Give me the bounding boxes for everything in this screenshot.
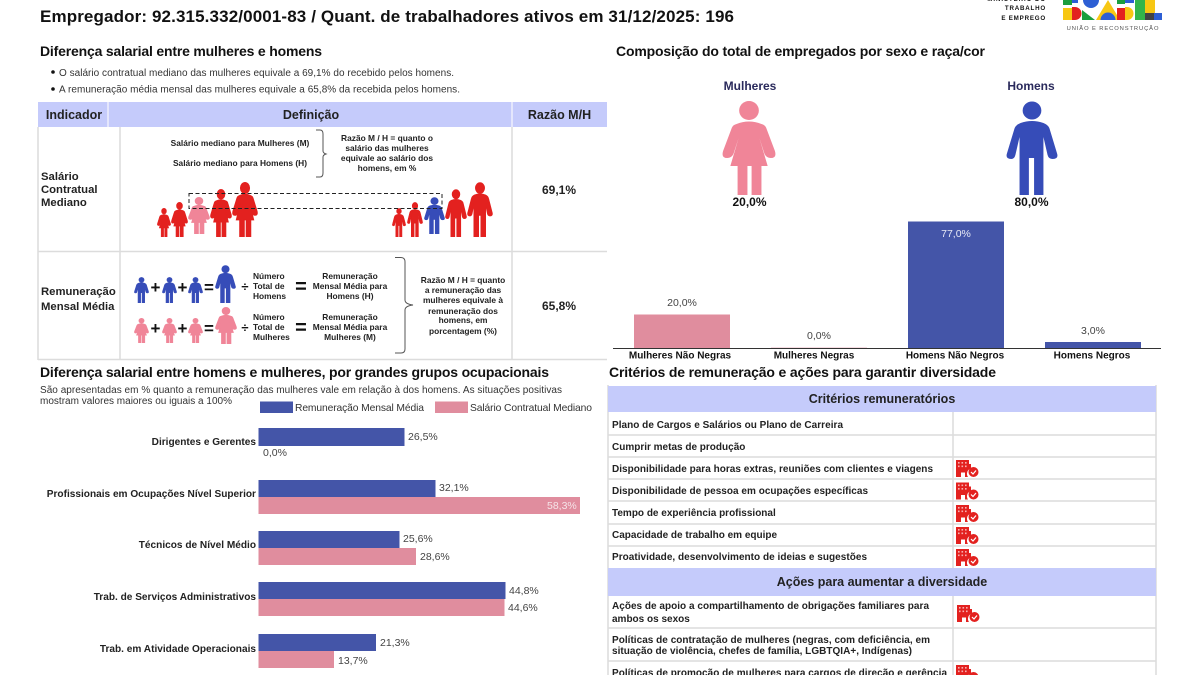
ratio definition (341, 133, 433, 173)
formula: women: + (178, 319, 188, 338)
action rows: ambos os sexos (612, 614, 690, 625)
ratio definition: homens, em (439, 315, 487, 325)
column chart: sex and race: 77,0% (941, 228, 971, 240)
ratio definition: a remuneração das (425, 285, 502, 295)
section heading: salary gap: Diferença salarial entre mulheres e homens (40, 43, 322, 59)
group: Técnicos (139, 531, 450, 565)
indicator name: Mensal Média (41, 301, 115, 313)
indicator name: Contratual (41, 184, 98, 196)
criteria rows: Capacidade de trabalho em equipe (612, 530, 777, 541)
table header (38, 102, 607, 127)
table: criteria and actions (608, 385, 1156, 675)
column chart: sex and race: 0,0% (807, 330, 831, 342)
formula: men: = (204, 278, 214, 297)
criteria rows: Plano de Cargos e Salários ou Plano de Carreira (612, 420, 843, 431)
salary labels: Salário mediano para Homens (H) (173, 158, 307, 168)
employer heading: Empregador: 92.315.332/0001-83 / Quant. de trabalhadores ativos em 31/12/2025: 196 (40, 7, 734, 26)
group: Técnicos: 28,6% (420, 551, 450, 563)
criteria rows (612, 420, 933, 563)
icons: company adopts (956, 460, 978, 566)
formula: women: = (204, 319, 214, 338)
summary bullets (51, 68, 460, 96)
header: Critérios remuneratórios (608, 386, 1156, 412)
icon: woman (723, 101, 775, 195)
formula: women: Total de (253, 322, 285, 332)
table header: Indicador (46, 108, 102, 122)
row: Salário Contratual Mediano (41, 130, 576, 237)
icon: women line-up (157, 183, 257, 237)
logo: Brasil: UNIÃO E RECONSTRUÇÃO (1067, 25, 1159, 32)
group: Dirigentes e Gerentes: 0,0% (263, 447, 287, 459)
formula: women: Mulheres (253, 332, 290, 342)
formula: men: Remuneração (322, 271, 378, 281)
group: Atividade Operacionais: Trab. em Atividade Operacionais (100, 644, 256, 655)
action rows: situação de violência, chefes de família, LGBTQIA+, Indígenas) (612, 646, 912, 657)
formula: women: Remuneração (322, 312, 378, 322)
ratio definition (421, 275, 505, 336)
ministry label (987, 0, 1046, 22)
column chart: sex and race: Homens Negros (1054, 350, 1131, 362)
column chart: sex and race: Mulheres Negras (774, 350, 855, 362)
group: Técnicos: Técnicos de Nível Médio (139, 540, 256, 551)
women share (723, 79, 777, 209)
formula: women (134, 307, 388, 344)
ratio definition: equivale ao salário dos (341, 153, 433, 163)
header: Critérios remuneratórios: Critérios remuneratórios (809, 392, 955, 406)
formula: women: Número (253, 312, 285, 322)
salary labels (171, 138, 310, 168)
formula: women: ÷ (241, 320, 249, 335)
section heading: occupational groups: Diferença salarial entre homens e mulheres, por grandes grupos ocupacionais (40, 364, 549, 380)
criteria rows: Cumprir metas de produção (612, 442, 745, 453)
action rows (612, 601, 947, 675)
formula: men: Número (253, 271, 285, 281)
table: salary indicators (38, 102, 607, 360)
summary bullets: O salário contratual mediano das mulheres equivale a 69,1% do recebido pelos homens. (59, 68, 454, 79)
women share: Mulheres (724, 79, 777, 93)
summary bullets: A remuneração média mensal das mulheres equivale a 65,8% da recebida pelos homens. (59, 84, 460, 96)
indicator name: Salário (41, 171, 79, 183)
section heading: criteria: Critérios de remuneração e ações para garantir diversidade (609, 364, 996, 380)
section heading: workforce composition: Composição do total de empregados por sexo e raça/cor (616, 43, 986, 59)
icon: men line-up (392, 183, 492, 237)
group: Dirigentes e Gerentes: Dirigentes e Gerentes (152, 437, 256, 448)
group: Dirigentes e Gerentes (152, 428, 438, 459)
table header: Razão M/H (528, 108, 591, 122)
men share: 80,0% (1014, 195, 1049, 209)
group: Técnicos: 25,6% (403, 533, 433, 545)
formula: women: Mensal Média para (313, 322, 388, 332)
icon: man (1007, 102, 1057, 195)
group: Serviços Administrativos: 44,8% (509, 585, 539, 597)
ministry label: TRABALHO (1005, 5, 1046, 12)
column chart: sex and race: Mulheres Não Negras (629, 350, 732, 362)
group: Serviços Administrativos (94, 582, 539, 616)
chart note: mostram valores maiores ou iguais a 100% (40, 396, 232, 407)
group: Serviços Administrativos: Trab. de Serviços Administrativos (94, 592, 256, 603)
formula: men: + (151, 278, 161, 297)
ratio definition: salário das mulheres (345, 143, 429, 153)
ministry label: E EMPREGO (1001, 15, 1046, 22)
formula: men: Total de (253, 281, 285, 291)
group: Atividade Operacionais: 21,3% (380, 637, 410, 649)
header: Ações para aumentar a diversidade: Ações para aumentar a diversidade (777, 575, 987, 589)
ratio definition: Razão M / H = quanto o (341, 133, 433, 143)
group: Profissionais: 32,1% (439, 482, 469, 494)
legend: Salário Contratual Mediano (470, 403, 592, 414)
logo: Brasil (1063, 0, 1162, 32)
column chart: sex and race (613, 222, 1161, 362)
group: Profissionais: 58,3% (547, 500, 577, 512)
men share (1007, 79, 1057, 209)
criteria rows: Disponibilidade para horas extras, reuniões com clientes e viagens (612, 464, 933, 475)
formula: men: Homens (253, 291, 286, 301)
salary labels: Salário mediano para Mulheres (M) (171, 138, 310, 148)
ratio definition: porcentagem (%) (429, 326, 497, 336)
ratio definition: Razão M / H = quanto (421, 275, 505, 285)
formula: men: Mensal Média para (313, 281, 388, 291)
criteria rows: Proatividade, desenvolvimento de ideias e sugestões (612, 552, 867, 563)
men share: Homens (1007, 79, 1055, 93)
column chart: sex and race: 20,0% (667, 297, 697, 309)
action rows: Políticas de contratação de mulheres (negras, com deficiência, em (612, 635, 930, 646)
group: Serviços Administrativos: 44,6% (508, 602, 538, 614)
group: Profissionais (47, 480, 580, 514)
legend (260, 402, 592, 414)
formula: women: = (295, 317, 307, 339)
ratio value: 69,1% (542, 183, 576, 197)
chart note (40, 385, 562, 407)
criteria rows: Disponibilidade de pessoa em ocupações específicas (612, 486, 868, 497)
formula: men: ÷ (241, 279, 249, 294)
action rows: Ações de apoio a compartilhamento de obrigações familiares para (612, 601, 929, 612)
indicator name (41, 171, 98, 209)
row: Remuneração Mensal Média (41, 258, 576, 353)
formula: men: + (178, 278, 188, 297)
bar chart: occupational groups (47, 428, 580, 668)
formula: men: Homens (H) (326, 291, 374, 301)
group: Dirigentes e Gerentes: 26,5% (408, 431, 438, 443)
ratio definition: homens, em % (358, 163, 417, 173)
ratio definition: mulheres equivale à (423, 295, 503, 305)
women share: 20,0% (732, 195, 767, 209)
legend: Remuneração Mensal Média (295, 403, 424, 414)
column chart: sex and race: 3,0% (1081, 325, 1105, 337)
formula: men: = (295, 276, 307, 298)
indicator name (41, 286, 116, 313)
group: Atividade Operacionais (100, 634, 410, 668)
formula: women: Mulheres (M) (324, 332, 376, 342)
median dashed box (189, 194, 442, 208)
ratio definition: remuneração dos (428, 306, 498, 316)
table header: Definição (283, 108, 339, 122)
formula: women: + (151, 319, 161, 338)
chart note: São apresentadas em % quanto a remuneração das mulheres vale em relação à dos homens. As situações positivas (40, 385, 562, 396)
icons: actions adopted (956, 605, 980, 675)
group: Atividade Operacionais: 13,7% (338, 655, 368, 667)
criteria rows: Tempo de experiência profissional (612, 508, 776, 519)
indicator name: Remuneração (41, 286, 116, 298)
brace (395, 258, 413, 353)
column chart: sex and race: Homens Não Negros (906, 350, 1005, 362)
formula: men (134, 266, 388, 303)
indicator name: Mediano (41, 197, 87, 209)
header: Ações para aumentar a diversidade (608, 568, 1156, 596)
group: Profissionais: Profissionais em Ocupações Nível Superior (47, 489, 256, 500)
brace (316, 130, 326, 177)
ratio value: 65,8% (542, 299, 576, 313)
